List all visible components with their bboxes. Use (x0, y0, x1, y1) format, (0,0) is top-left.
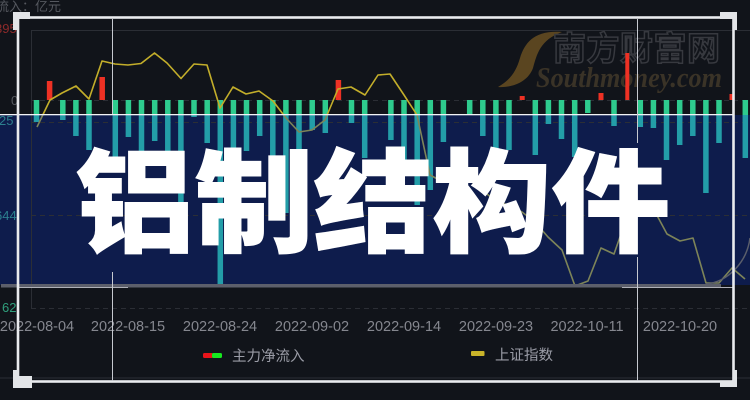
overlay arc, lower right (706, 238, 750, 284)
date axis labels: 2022-10-11 (550, 319, 624, 335)
date axis labels (0, 319, 717, 335)
legend: shanghai composite (471, 347, 553, 364)
date axis labels: 2022-10-20 (643, 319, 717, 335)
overlay bottom band (1, 284, 721, 288)
watermark: southmoney logo: 南方财富网 (553, 30, 720, 67)
watermark: southmoney logo (498, 30, 722, 94)
date axis labels: 2022-09-02 (275, 319, 349, 335)
date axis labels: 2022-08-24 (183, 319, 257, 335)
y axis labels (0, 21, 18, 315)
date axis labels: 2022-09-23 (459, 319, 533, 335)
legend: main net inflow (203, 348, 304, 365)
legend: main net inflow: 主力净流入 (232, 348, 304, 365)
legend: shanghai composite: 上证指数 (495, 347, 553, 364)
date axis labels: 2022-08-15 (91, 319, 165, 335)
overlay top line (0, 114, 733, 115)
line chart: shanghai composite (37, 53, 745, 286)
y axis labels: 0 (11, 93, 18, 108)
title: 铝制结构件 (76, 114, 670, 276)
date axis labels: 2022-09-14 (367, 319, 441, 335)
y axis labels: 62 (2, 300, 16, 315)
navy overlay band (0, 115, 750, 285)
bar chart: main net inflow (36, 53, 745, 285)
date axis labels: 2022-08-04 (0, 319, 74, 335)
watermark: southmoney logo: Southmoney.com (536, 62, 722, 94)
